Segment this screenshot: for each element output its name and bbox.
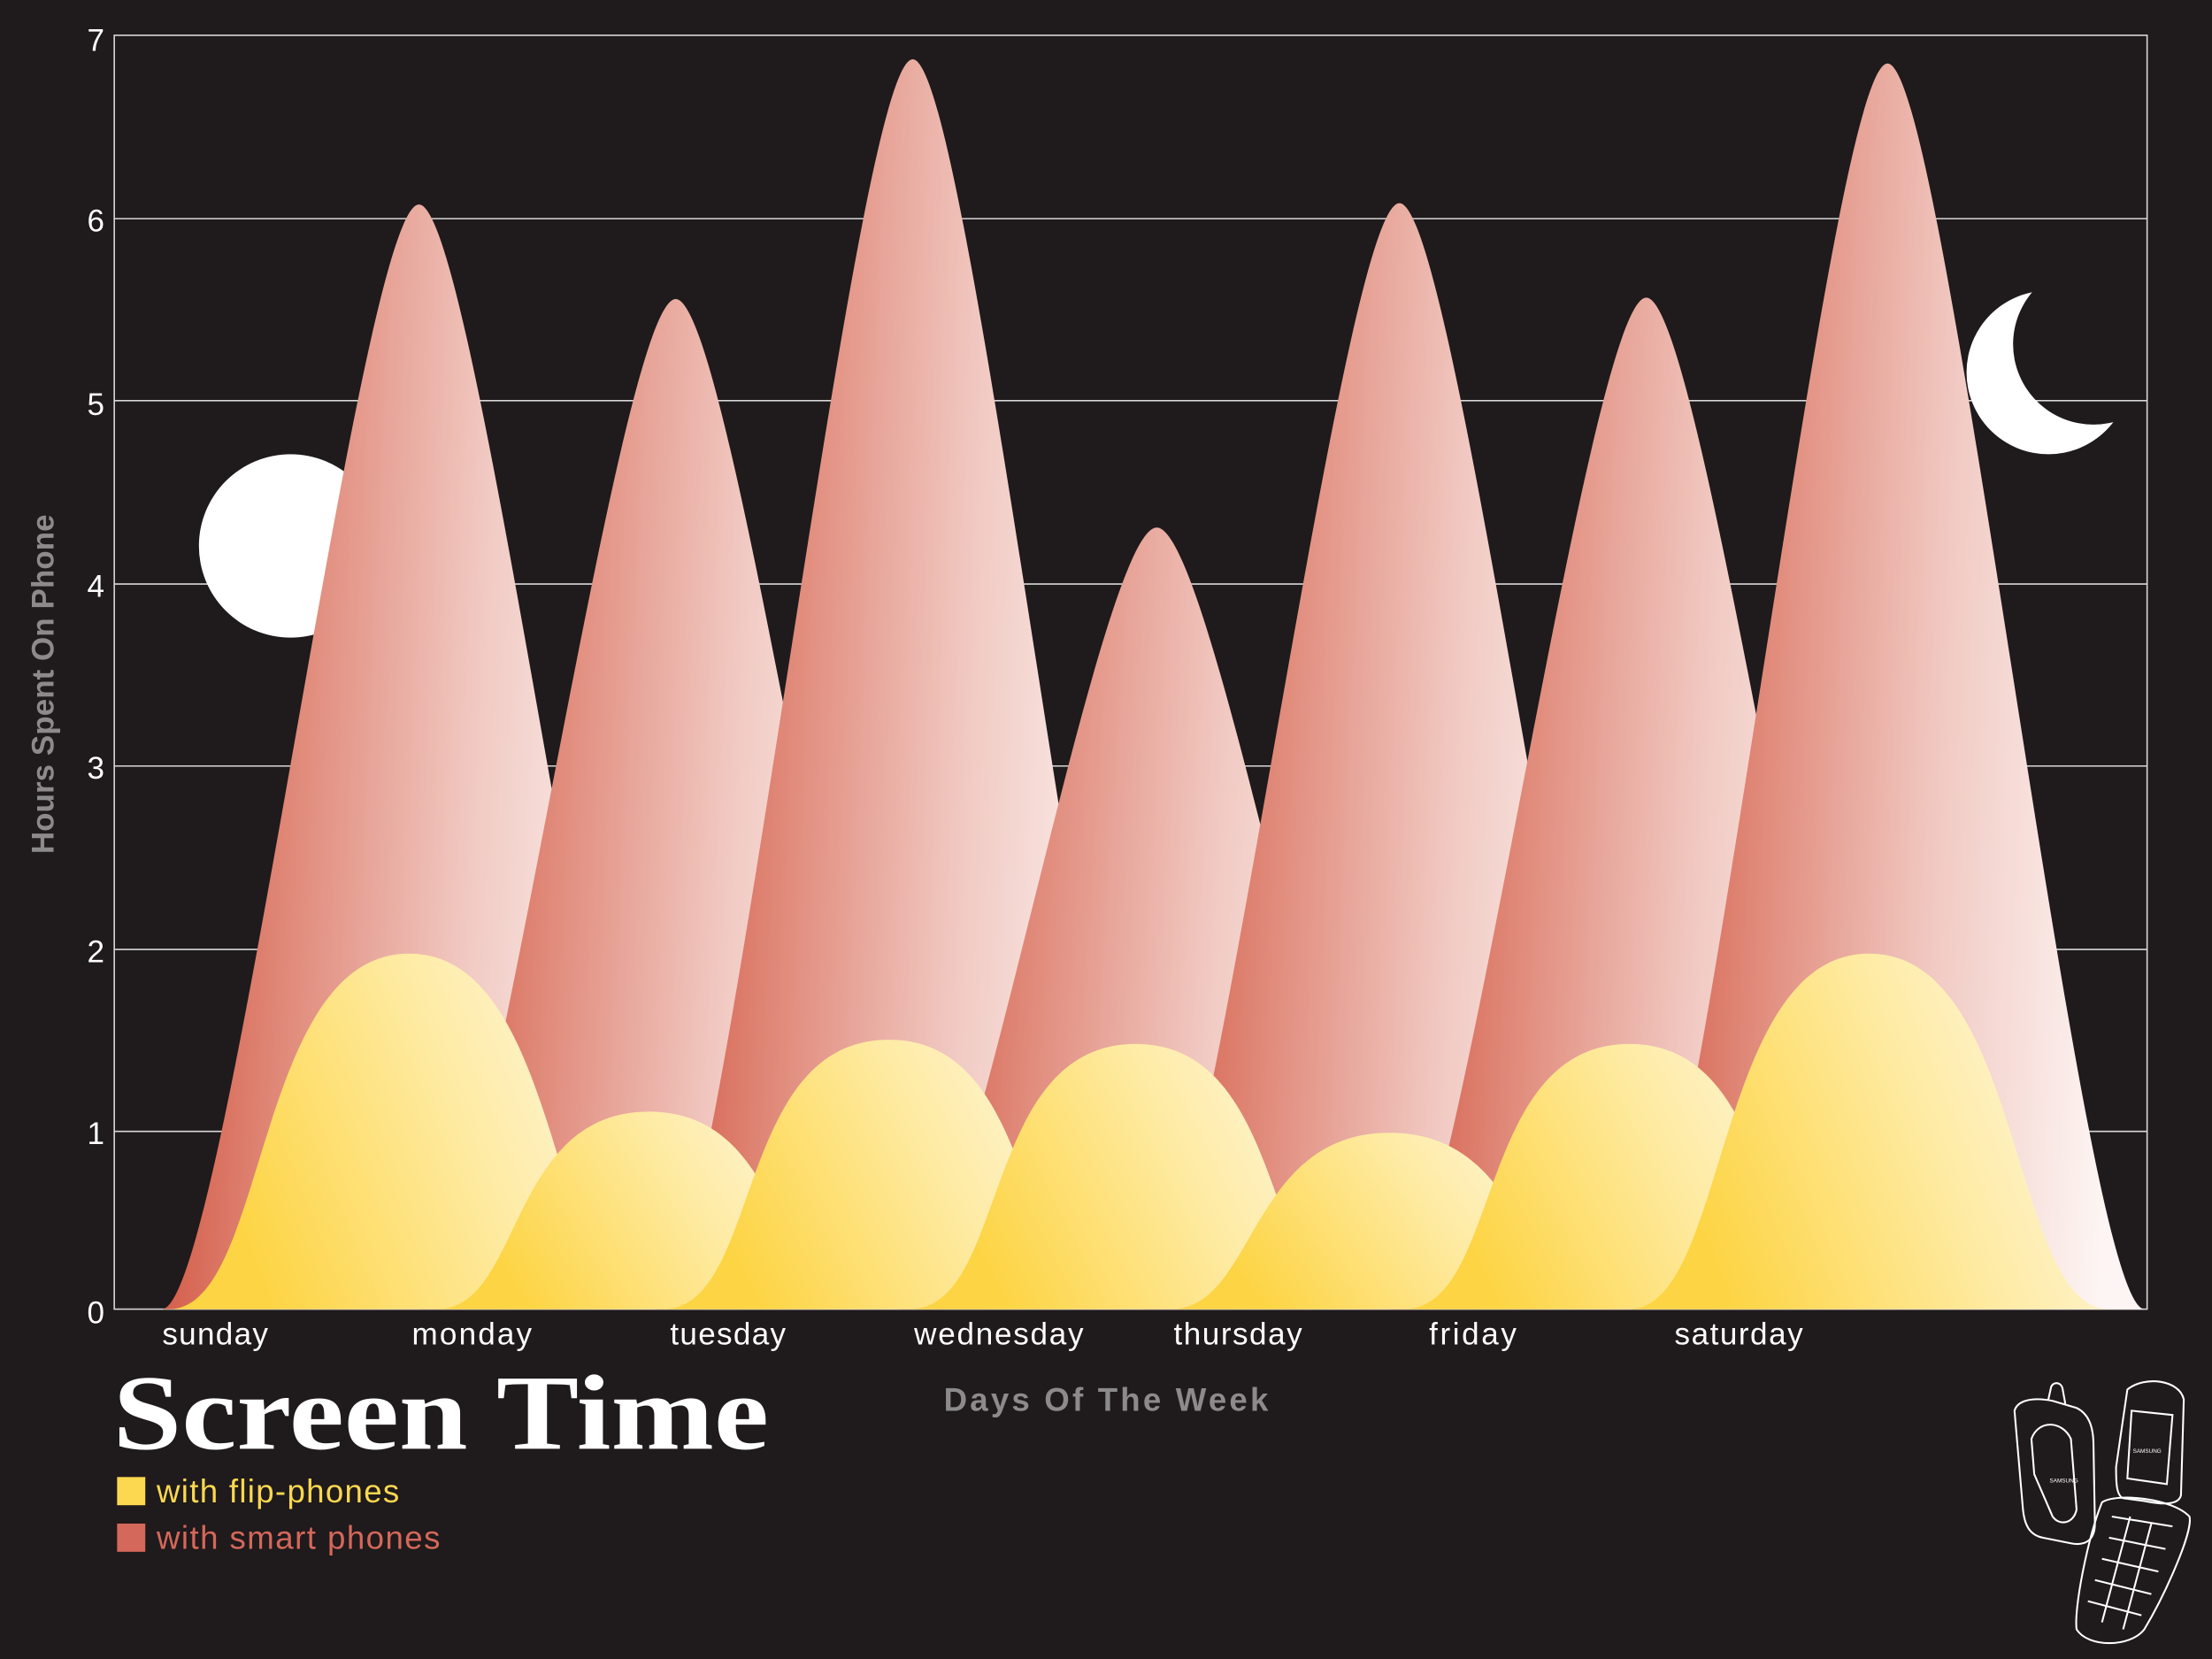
x axis title: Days Of The Week [944,1381,1269,1417]
flip phone hills [169,954,2109,1310]
y axis tick labels: 2 [87,934,104,969]
y axis tick labels: 6 [87,204,104,238]
legend: with smart phones [156,1520,440,1556]
legend [117,1473,440,1556]
y axis tick labels: 5 [87,388,104,422]
y axis tick labels: 7 [87,23,104,58]
icon: flip phones [2015,1381,2190,1643]
x axis day labels: monday [412,1317,533,1351]
x axis day labels: saturday [1675,1317,1803,1351]
icon: crescent moon [1966,292,2113,455]
y axis title: Hours Spent On Phone [27,514,61,854]
y axis tick labels: 0 [87,1296,104,1331]
icon: flip phones: SAMSUNG [2050,1479,2078,1485]
x axis day labels: wednesday [913,1317,1084,1351]
y axis tick labels: 4 [87,569,104,603]
x axis day labels: friday [1429,1317,1517,1351]
x axis day labels [162,1317,1803,1351]
y axis tick labels [87,23,104,1331]
x axis day labels: thursday [1174,1317,1302,1351]
chart frame and gridlines [114,35,2147,1310]
x axis day labels: sunday [162,1317,268,1351]
smart phone spikes [162,59,2144,1310]
legend: with flip-phones [156,1473,399,1509]
y axis tick labels: 1 [87,1117,104,1151]
icon: flip phones: SAMSUNG [2133,1448,2162,1455]
icon: sun [199,454,382,638]
title: Screen Time [113,1354,769,1472]
x axis day labels: tuesday [670,1317,787,1351]
y axis tick labels: 3 [87,751,104,786]
